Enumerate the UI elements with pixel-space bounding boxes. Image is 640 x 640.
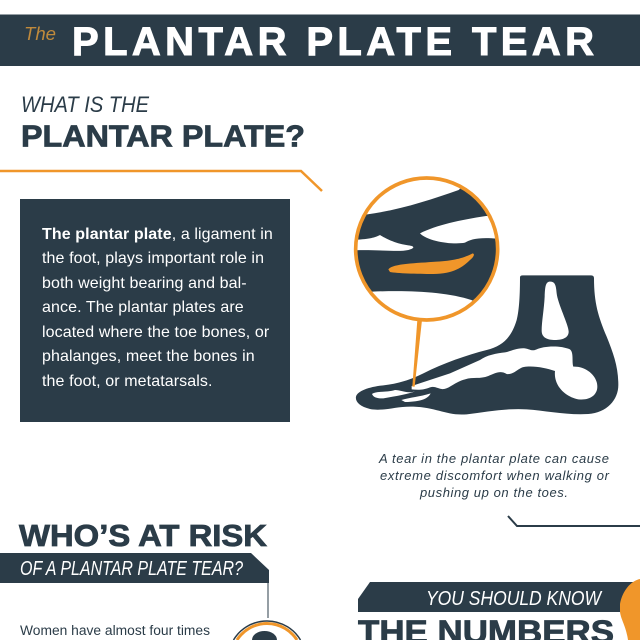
panel: plantar plate definition [20,199,290,422]
illustration: foot x-ray with magnified plantar plate [340,170,618,415]
title banner: PLANTAR PLATE TEAR [72,20,594,64]
banner: you should know [358,582,640,612]
caption: tear discomfort: pushing up on the toes. [419,485,568,500]
panel: plantar plate definition: The plantar plate [42,226,172,243]
title banner: The [24,24,56,44]
heading: what is the plantar plate [21,92,305,154]
magnifier pointer [412,320,422,387]
toe bones [372,390,415,398]
panel: plantar plate definition: both weight bearing and bal- [42,275,247,292]
panel: plantar plate definition: , a ligament in [172,226,273,243]
metatarsal and heel bones [412,346,597,400]
ankle bone [542,282,569,340]
icon: woman in circle [234,621,300,640]
heading: what is the plantar plate: PLANTAR PLATE? [21,118,305,154]
magnifier ring [356,178,498,320]
heading: what is the plantar plate: WHAT IS THE [21,92,149,117]
banner: you should know: YOU SHOULD KNOW [426,588,603,610]
dark divider line [508,516,640,526]
panel: plantar plate definition: phalanges, meet the bones in [42,348,255,365]
caption: tear discomfort [378,451,610,500]
banner: of a plantar plate tear [0,553,269,583]
orange divider line [0,171,322,191]
heading: who's at risk: WHO’S AT RISK [19,519,267,553]
panel: plantar plate definition: ance. The plantar plates are [42,299,244,316]
foot silhouette [356,275,618,415]
magnified view [358,188,496,300]
connector line [267,583,269,618]
title banner [0,14,640,66]
caption: tear discomfort: extreme discomfort when walking or [380,468,610,483]
risk text: Women have almost four times [20,623,210,638]
banner: of a plantar plate tear: OF A PLANTAR PLATE TEAR? [20,558,244,580]
caption: tear discomfort: A tear in the plantar plate can cause [378,451,609,466]
panel: plantar plate definition: the foot, or metatarsals. [42,373,213,390]
panel: plantar plate definition: the foot, plays important role in [42,250,264,267]
panel: plantar plate definition: located where the toe bones, or [42,324,270,341]
orange head silhouette [620,579,640,640]
